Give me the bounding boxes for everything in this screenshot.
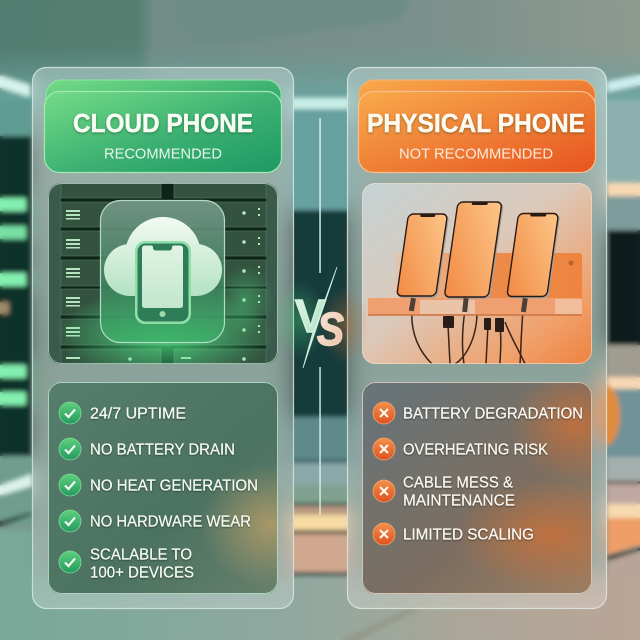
vs badge: V (295, 290, 326, 342)
item: no heat generation (59, 474, 258, 496)
image: phones on shelf with cables (362, 183, 592, 364)
item: no hardware wear (59, 510, 251, 532)
item: no hardware wear: NO HARDWARE WEAR (90, 514, 251, 530)
panel: physical phone (346, 66, 608, 610)
vs badge (274, 267, 369, 368)
panel: cloud phone (32, 66, 294, 610)
image: server rack with cloud phone icon (48, 183, 278, 364)
header: physical phone (358, 80, 596, 172)
subtitle: RECOMMENDED (104, 146, 222, 162)
item: battery degradation: BATTERY DEGRADATION (403, 406, 583, 422)
item: scalable to 100+ devices (59, 546, 194, 582)
item: 24/7 uptime (59, 402, 186, 424)
cable plugs (409, 298, 528, 312)
list: physical phone drawbacks (362, 382, 592, 594)
item: no battery drain (59, 438, 235, 460)
phone right (507, 214, 560, 298)
icon: cloud (104, 217, 222, 296)
item: no heat generation: NO HEAT GENERATION (90, 478, 258, 494)
item: battery degradation (373, 402, 583, 424)
item: overheating risk: OVERHEATING RISK (403, 442, 549, 458)
center divider: bottom line (319, 367, 321, 515)
item: limited scaling: LIMITED SCALING (403, 526, 534, 544)
icon: glass tile (100, 200, 224, 342)
item: scalable to 100+ devices: SCALABLE TO (90, 546, 192, 564)
item: cable mess and maintenance: CABLE MESS & (403, 474, 514, 492)
shelf back plate (395, 253, 582, 299)
title: PHYSICAL PHONE (367, 110, 585, 138)
item: scalable to 100+ devices: 100+ DEVICES (90, 564, 194, 582)
vs badge: S (317, 303, 344, 355)
phone middle (444, 202, 504, 299)
list: cloud phone benefits (48, 382, 278, 594)
center divider: top line (319, 118, 321, 273)
cables (411, 315, 526, 364)
item: cable mess and maintenance: MAINTENANCE (403, 492, 515, 510)
shelf (368, 298, 582, 315)
item: limited scaling (373, 523, 534, 545)
item: cable mess and maintenance (373, 474, 515, 510)
item: no battery drain: NO BATTERY DRAIN (90, 442, 235, 458)
subtitle: NOT RECOMMENDED (399, 146, 553, 162)
item: overheating risk (373, 438, 549, 460)
item: 24/7 uptime: 24/7 UPTIME (90, 406, 186, 422)
header: cloud phone (44, 80, 282, 172)
title: CLOUD PHONE (73, 110, 253, 138)
phone left (396, 214, 450, 298)
icon: smartphone (135, 241, 191, 324)
